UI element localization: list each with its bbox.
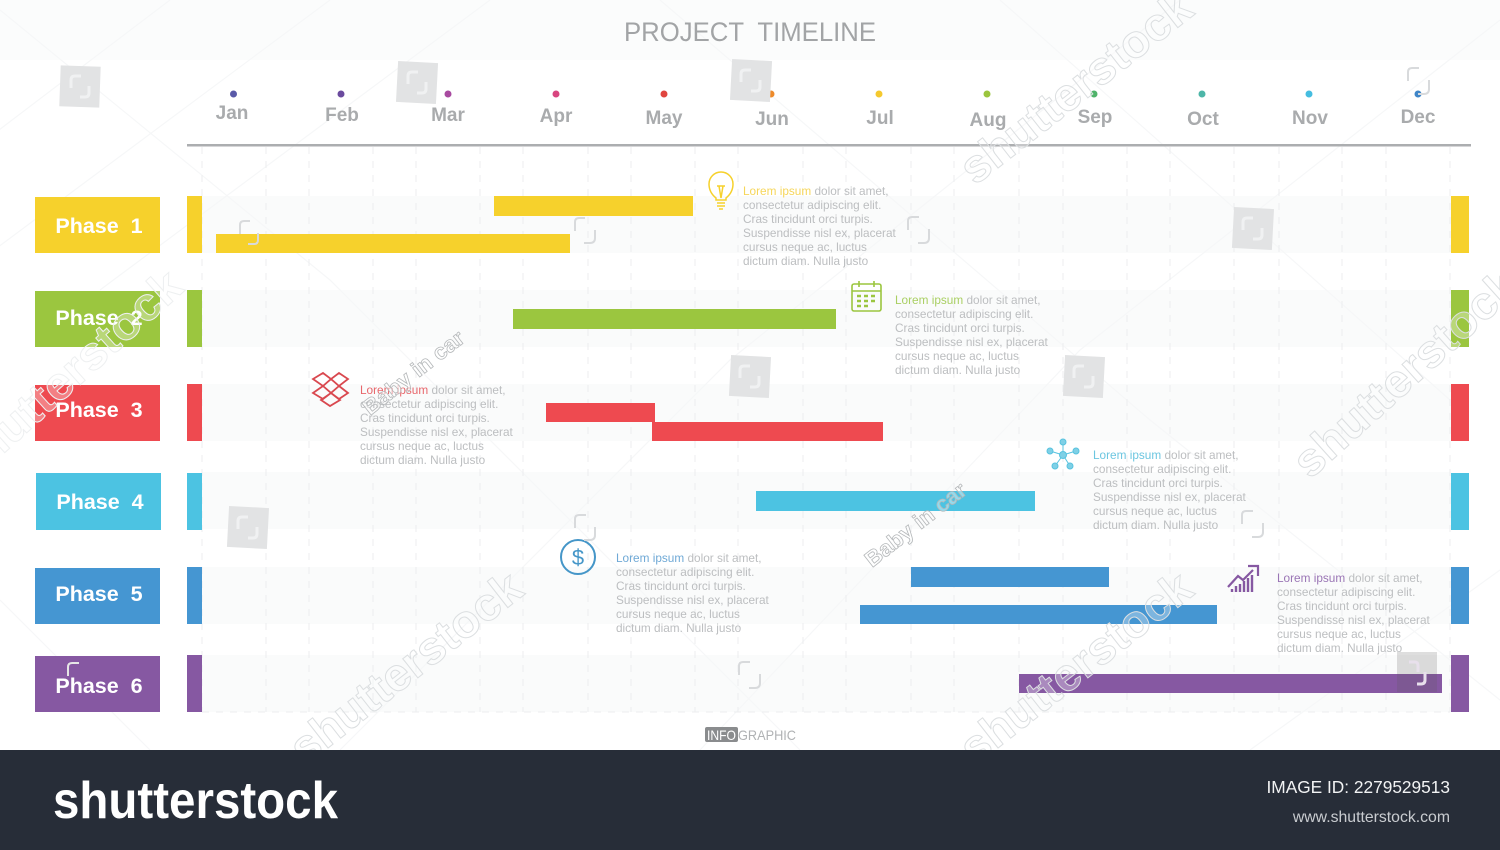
text block: phase 1: dictum diam. Nulla justo [743,254,869,268]
watermark: shutterstock text: Baby in car [358,325,470,420]
month header: Jul [866,108,894,129]
phase 3 row [35,384,1469,441]
text block: phase 5: Cras tincidunt orci turpis. [616,579,746,593]
month header: Oct [1187,109,1220,130]
phase 5 row [35,567,1469,624]
text block: phase 1: Lorem ipsum dolor sit amet, [743,184,889,198]
icon: dollar coin [561,540,595,574]
month header: Aug [970,110,1006,131]
month header: Dec [1401,107,1436,128]
infographic logo: GRAPHIC [738,727,796,743]
phase 3 row: Phase 3 [55,398,143,422]
month header: Jun [755,109,789,130]
text block: phase 2: cursus neque ac, luctus [895,349,1019,363]
title: PROJECT TIMELINE [624,17,876,47]
axis line [187,144,1471,146]
text block: phase 2: Suspendisse nisl ex, placerat [895,335,1049,349]
phase 2 row: Phase 2 [55,306,143,330]
phase 4 row: Phase 4 [56,490,144,514]
text block: phase 5: dictum diam. Nulla justo [616,621,742,635]
watermark: shutterstock text: Baby in car [860,477,972,572]
month header: Nov [1292,108,1328,129]
text block: phase 3: consectetur adipiscing elit. [360,397,498,411]
watermark: shutterstock text: shutterstock [279,560,532,774]
text block: phase 6: Lorem ipsum dolor sit amet, [1277,571,1423,585]
month header: May [646,108,683,129]
text block: phase 5: consectetur adipiscing elit. [616,565,754,579]
phase 4 row [36,473,1469,530]
phase 5 row: Phase 5 [55,582,143,606]
phase 6 row: Phase 6 [55,674,143,698]
month header [216,90,1436,131]
text block: phase 2: Cras tincidunt orci turpis. [895,321,1025,335]
infographic logo: INFO [707,727,736,743]
text block: phase 4: Lorem ipsum dolor sit amet, [1093,448,1239,462]
text block: phase 5: Suspendisse nisl ex, placerat [616,593,770,607]
text block: phase 2: consectetur adipiscing elit. [895,307,1033,321]
footer bar [0,750,1500,850]
icon: network [1047,439,1079,469]
text block: phase 3: Suspendisse nisl ex, placerat [360,425,514,439]
grid lines [202,147,1450,712]
phase 1 row: Phase 1 [55,214,143,238]
text block: phase 6: cursus neque ac, luctus [1277,627,1401,641]
text block: phase 6: Suspendisse nisl ex, placerat [1277,613,1431,627]
watermark: logo outlines [68,68,1429,688]
month header: Sep [1078,107,1112,128]
text block: phase 4: Suspendisse nisl ex, placerat [1093,490,1247,504]
text block: phase 4: dictum diam. Nulla justo [1093,518,1219,532]
text block: phase 1: consectetur adipiscing elit. [743,198,881,212]
phase 6 row [35,655,1469,712]
month header: Apr [540,106,573,127]
text block: phase 1: Cras tincidunt orci turpis. [743,212,873,226]
footer website: www.shutterstock.com [1292,809,1450,826]
icon: light bulb [709,172,733,209]
month header: Feb [325,105,359,126]
text block: phase 5: cursus neque ac, luctus [616,607,740,621]
text block: phase 6: consectetur adipiscing elit. [1277,585,1415,599]
text block: phase 2: dictum diam. Nulla justo [895,363,1021,377]
icon: calendar [852,281,881,311]
footer logo: shutterstock [53,772,338,830]
watermark: shutterstock text: shutterstock [949,560,1202,774]
text block: phase 3: dictum diam. Nulla justo [360,453,486,467]
text block: phase 1: Suspendisse nisl ex, placerat [743,226,897,240]
phase 1 row [35,196,1469,253]
month header: Jan [216,103,248,124]
text block: phase 3: cursus neque ac, luctus [360,439,484,453]
text block: phase 4: Cras tincidunt orci turpis. [1093,476,1223,490]
watermark: square logo glyphs [71,70,1425,684]
text block: phase 6: Cras tincidunt orci turpis. [1277,599,1407,613]
month header: Mar [431,105,465,126]
text block: phase 1: cursus neque ac, luctus [743,240,867,254]
phase 2 row [35,290,1469,347]
icon: growth chart [1228,566,1258,592]
watermark: logo squares [59,59,1437,692]
footer image id: IMAGE ID: 2279529513 [1266,777,1450,797]
text block: phase 2: Lorem ipsum dolor sit amet, [895,293,1041,307]
text block: phase 6: dictum diam. Nulla justo [1277,641,1403,655]
infographic logo [705,727,796,743]
text block: phase 4: consectetur adipiscing elit. [1093,462,1231,476]
icon: dollar coin: $ [572,545,584,570]
text block: phase 3: Cras tincidunt orci turpis. [360,411,490,425]
row backgrounds [202,196,1451,712]
text block: phase 3: Lorem ipsum dolor sit amet, [360,383,506,397]
text block: phase 5: Lorem ipsum dolor sit amet, [616,551,762,565]
icon: box diamonds [313,373,348,406]
text block: phase 4: cursus neque ac, luctus [1093,504,1217,518]
